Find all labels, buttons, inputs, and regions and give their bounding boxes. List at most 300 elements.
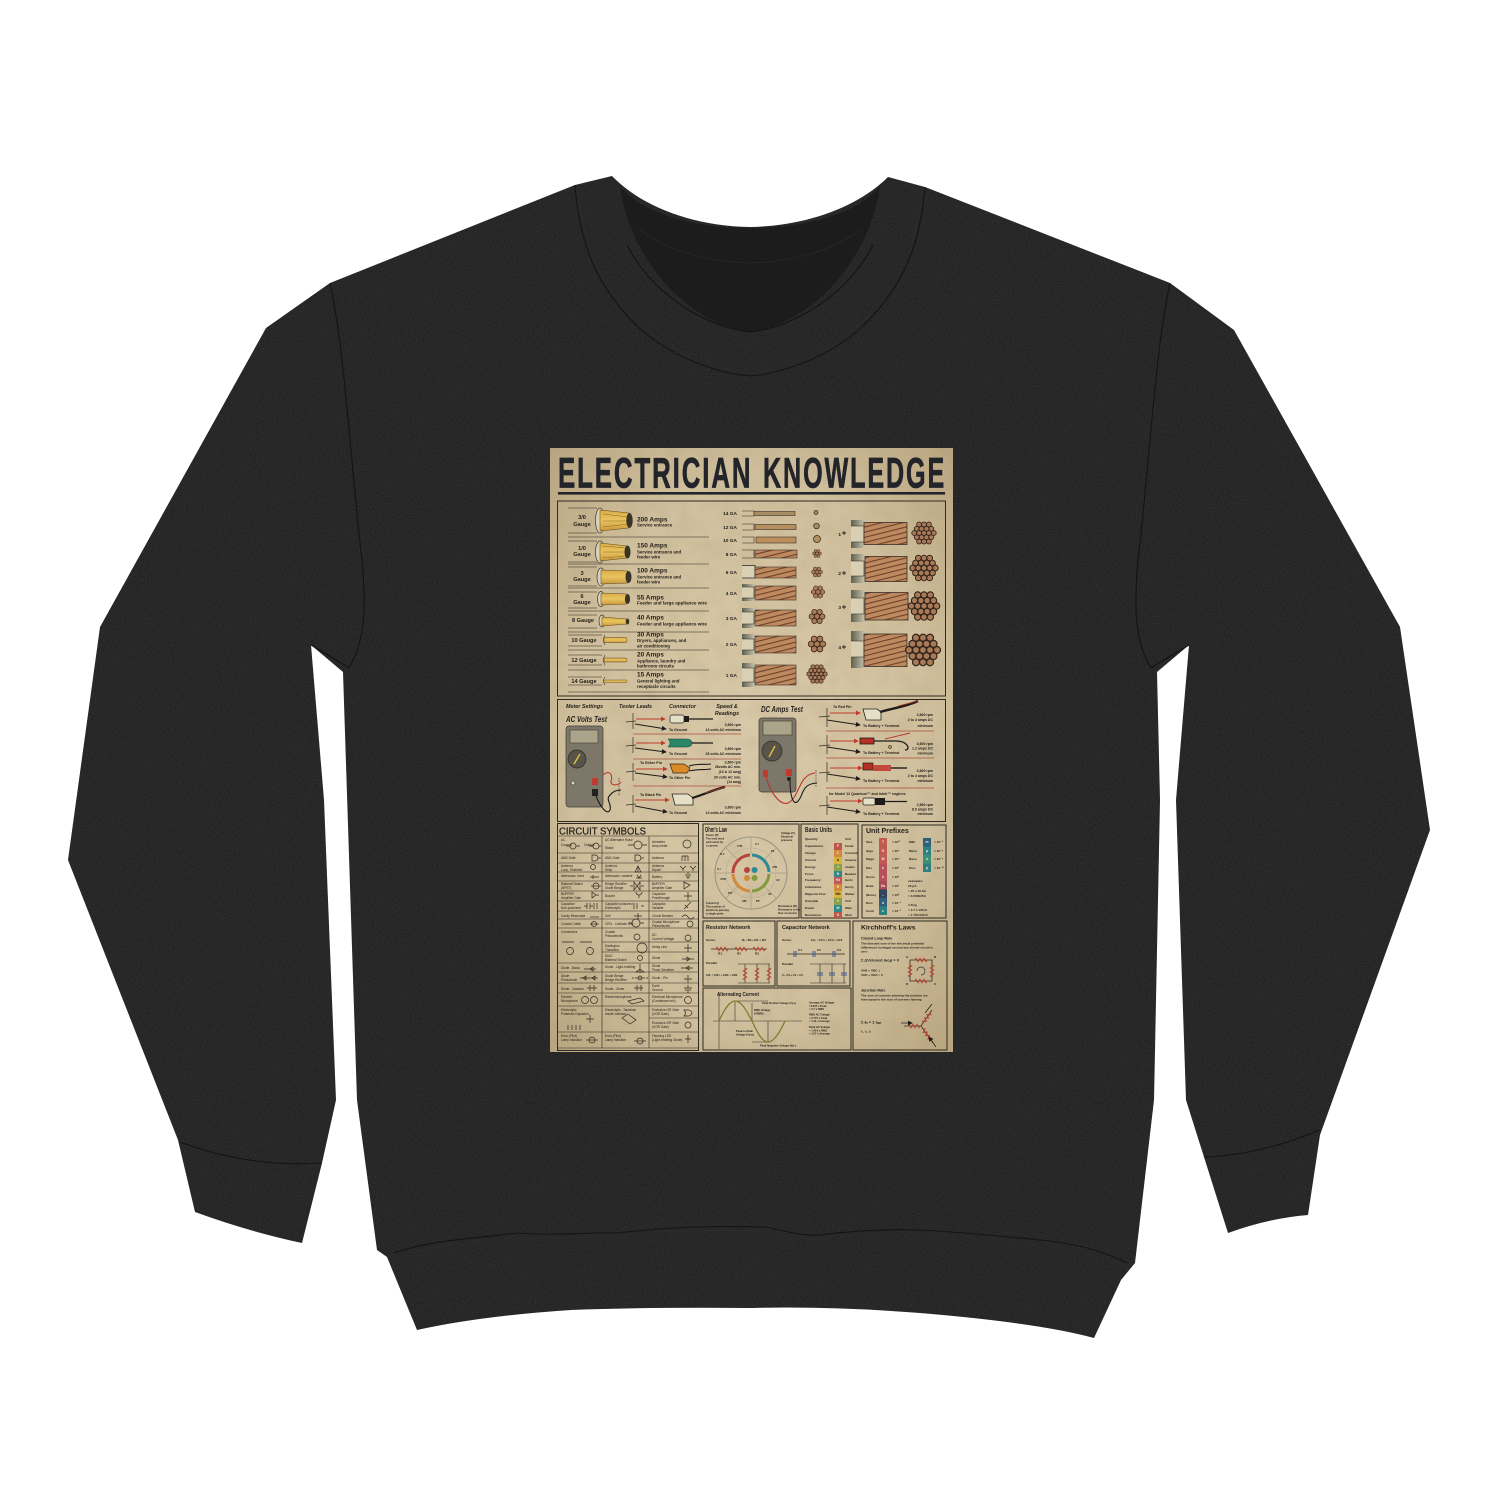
row: 3 gauge: 100 Amps (637, 568, 668, 574)
row: 3 gauge: feeder wire (637, 580, 661, 584)
AC row 1: 14 volts AC minimum (706, 728, 741, 732)
prefixes table: Micro (909, 849, 917, 853)
prefixes table: Giga (866, 849, 873, 853)
symbol labels, column 1: Cavity Resonator (561, 914, 586, 918)
units table: Quantity (805, 837, 818, 841)
DC row 3: 2 to 4 amps DC (908, 774, 933, 778)
panel: basic units (801, 824, 859, 918)
column headers: Speed & (716, 704, 738, 710)
units table: Ohm (845, 913, 852, 917)
wheel (715, 837, 787, 909)
DC row 2 (819, 733, 934, 758)
large cables 1/0 to 4/0 (838, 520, 940, 668)
copper wire sizes 14 GA to 1 GA: 12 GA (723, 525, 738, 531)
Ohm's law corner notes: a current (706, 844, 718, 848)
prefixes table: × 10⁰ (892, 893, 900, 897)
prefixes table: Centi (866, 909, 874, 913)
series diagram: C2 (817, 948, 821, 952)
symbol labels, column 2: Buzzer (605, 894, 616, 898)
symbol labels, column 2: Lamp Indicator (605, 1038, 627, 1042)
right cuff seam (1204, 1130, 1320, 1157)
prefixes table: × 10⁻³ (934, 840, 943, 844)
row: 10 gauge: 30 Amps (637, 632, 664, 638)
symbol labels, column 1: (SPST) (561, 886, 571, 890)
copper wire sizes 14 GA to 1 GA: 4 GA (726, 591, 738, 597)
symbol labels, column 1 (561, 838, 595, 1042)
wheel: V/R (742, 899, 747, 903)
series diagram (706, 938, 767, 956)
row: 1/0 gauge: feeder wire (637, 554, 661, 560)
voltage formulas: =0.637 x Peak (809, 1004, 827, 1008)
symbol labels, column 2: Whip (605, 868, 612, 872)
symbol labels, column 2: Diode Bridge (605, 974, 624, 978)
wheel: P/I² (756, 899, 760, 903)
row: 3 gauge: Service entrance and (637, 574, 681, 580)
AC row 2: 28 volts AC minimum (706, 752, 741, 756)
row: 12 gauge: bathroom circuits (637, 664, 675, 668)
units table: Wb (835, 892, 841, 896)
copper wire sizes 14 GA to 1 GA: 3 GA (726, 616, 738, 622)
units table: Charge (805, 851, 816, 855)
prefixes table: – (882, 893, 884, 897)
symbol labels, column 1: Amplifier Gate (561, 896, 581, 900)
row: 1/0 gauge: Gauge (573, 552, 591, 558)
collar (575, 185, 925, 376)
series diagram: R3 (755, 952, 759, 956)
panel: circuit symbols (558, 824, 698, 1050)
symbols grid (558, 836, 698, 1048)
prefixes table: c (882, 909, 884, 913)
DC row 1 (819, 701, 934, 731)
prefixes table: × 10⁻² (892, 909, 901, 913)
units table: C (837, 851, 840, 855)
row: 14 gauge: 15 Amps (637, 672, 664, 678)
prefixes table: G (882, 849, 885, 853)
wheel: R·I² (720, 852, 725, 856)
prefixes table: × 10⁻⁶ (934, 849, 944, 853)
Ohm's law corner notes (706, 831, 801, 916)
prefixes table: × 10⁻¹² (934, 866, 944, 870)
sweatshirt body silhouette (68, 176, 1430, 1338)
closed loop rule: zero (861, 950, 867, 954)
units table: Power (805, 906, 815, 910)
row: 14 gauge: 14 Gauge (571, 679, 597, 685)
symbol labels, column 3: Diode (652, 956, 661, 960)
AC volts test heading: AC Volts Test (565, 715, 607, 724)
symbol labels, column 1: BUFFER (561, 892, 574, 896)
row: 3/0 gauge (573, 508, 673, 533)
AC row 4: 3,600 rpm (725, 806, 741, 810)
AC row 4: To Black Pin (640, 793, 661, 797)
symbol labels, column 2: Electrolytic (605, 906, 621, 910)
symbol labels, column 3: Ammeter (652, 840, 666, 844)
heading: Basic Units (805, 827, 832, 834)
symbol labels, column 3: Feedthrough (652, 896, 670, 900)
parallel diagram: Cₜ =C1+ C2 + C3 (782, 973, 803, 977)
closed loop rule: VAB + VBC + (861, 968, 880, 972)
symbol labels, column 2: AND Gate (605, 856, 620, 860)
junction rule: then equal to the sum of currents leaving (861, 998, 922, 1002)
prefixes table: × 10¹ (892, 884, 899, 888)
closed loop rule: differences (voltage) around any closed circuit is (861, 946, 933, 950)
Ohm's law corner notes: Power (P) (706, 833, 718, 837)
symbol labels, column 2: Diode - Zener (605, 987, 625, 991)
symbol labels, column 1: Diode (561, 974, 570, 978)
wheel: P/I (771, 849, 775, 853)
series diagram (782, 938, 845, 957)
wheel: I·R (776, 878, 780, 882)
AC row 1: 3,600 rpm (725, 723, 741, 727)
prefixes table: Deci (866, 901, 873, 905)
title (558, 449, 946, 497)
sine chart: Voltage (Vp-p) (736, 1032, 754, 1036)
symbol labels, column 3 (652, 840, 683, 1042)
prefixes table: d (882, 901, 884, 905)
row: 1/0 gauge: Service entrance and (637, 550, 681, 554)
series diagram: Series (706, 938, 716, 942)
closed loop rule: VCD + VDA = 0 (861, 973, 883, 977)
units table: A (837, 858, 840, 862)
AC row 3: To Other Pin (669, 776, 690, 780)
parallel diagram (706, 961, 771, 983)
row: 3 gauge (573, 568, 681, 586)
hem seam (394, 1227, 1127, 1263)
DC row 4: 8.5 amps DC (912, 808, 933, 812)
symbol labels, column 2: Euro (Pilot) (605, 1034, 621, 1038)
prefixes table: m (925, 840, 929, 844)
DC row 2: minimum (917, 752, 933, 756)
Ohm's law corner notes: Resistance to the (778, 908, 801, 912)
symbol labels, column 1: Euro (Pilot) (561, 1034, 577, 1038)
column headers: Tester Leads (619, 704, 652, 710)
prefixes table: × 10⁻⁹ (934, 857, 944, 861)
closed loop rule: A (906, 955, 909, 959)
row: 10 gauge (571, 632, 687, 648)
DC row 3: 3,600 rpm (917, 769, 933, 773)
prefixes table: n (926, 857, 928, 861)
prefixes table: × 10³ (892, 866, 899, 870)
row: 14 gauge: receptacle circuits (637, 684, 676, 689)
prefixes table: Hecto (866, 875, 875, 879)
AC row 3: 30 volts AC min. (714, 776, 741, 780)
symbol labels, column 1: Diode - Varactor (561, 987, 585, 991)
parallel diagram: 1/Rₜ = 1/R1 + 1/R2 + 1/R3 (706, 973, 738, 977)
heading: Resistor Network (706, 925, 750, 931)
prefix examples (908, 879, 928, 917)
symbol labels, column 3: Antenna (652, 864, 664, 868)
units table (805, 837, 859, 918)
symbol labels, column 3: BUFFER (652, 882, 665, 886)
closed loop rule: B (934, 955, 937, 959)
symbol labels, column 2: Cell (605, 914, 611, 918)
symbol labels, column 2: Capacitor polarized (605, 902, 633, 906)
symbol labels, column 3: Capacitor (652, 902, 667, 906)
symbol labels, column 1: Coaxial Cable (561, 922, 581, 926)
copper wire sizes 14 GA to 1 GA: 1 GA (726, 673, 738, 679)
left cuff seam (180, 1142, 322, 1164)
symbol labels, column 1: Lamp Indicator (561, 1038, 583, 1042)
symbol labels, column 1: Electret (561, 995, 572, 999)
prefixes table: Deka (866, 884, 874, 888)
row: 3/0 gauge: 200 Amps (637, 516, 668, 524)
symbol labels, column 1: Capacitor (561, 902, 576, 906)
panel: resistor network (703, 921, 775, 986)
row: 6 gauge: 6 (580, 594, 584, 600)
wire cross sections (807, 510, 827, 683)
symbol labels, column 3: Electrical Microphone (652, 995, 683, 999)
AC row 4: 14 volts AC minimum (706, 811, 741, 815)
panel: unit prefixes (862, 825, 946, 918)
symbol labels, column 2: Electrolytic - Tantalum (605, 1008, 636, 1012)
symbol labels, column 3: Circuit Breaker (652, 914, 674, 918)
row: 14 gauge (571, 672, 680, 689)
panel: meter tests (558, 700, 946, 822)
heading: Ohm's Law (705, 827, 727, 834)
series diagram: C1 (798, 948, 802, 952)
symbol labels, column 3: Earth (652, 984, 660, 988)
copper wire sizes 14 GA to 1 GA: 2 GA (726, 642, 738, 648)
DC row 1: To Red Pin (833, 705, 852, 709)
parallel diagram (782, 962, 847, 983)
AC row 3: (10 & 12 awg) (719, 770, 741, 774)
symbol labels, column 1: Voltage (584, 843, 595, 847)
row: 1/0 gauge: 150 Amps (637, 542, 668, 550)
DC row 2: To Battery + Terminal (863, 751, 899, 755)
row: 10 gauge: Dryers, appliances, and (637, 638, 687, 643)
panel: capacitor network (777, 921, 850, 986)
symbol labels, column 1: Connectors (561, 930, 578, 934)
prefixes table: Pico (909, 866, 916, 870)
prefixes table: k (882, 866, 884, 870)
symbol labels, column 3: Antenna (652, 856, 664, 860)
symbol labels, column 3: Diode (652, 964, 661, 968)
fabric texture (60, 170, 1440, 1345)
title: ELECTRICIAN (558, 449, 752, 497)
symbol labels, column 3: Dipole (652, 868, 661, 872)
row: 10 gauge: 10 Gauge (571, 638, 597, 644)
wheel: √P/R (720, 877, 726, 881)
AC row 4: To Ground (669, 811, 687, 815)
wheel: V²/R (737, 844, 742, 848)
symbol labels, column 1: Non-polarized (561, 906, 581, 910)
voltage formulas: = 1.414 x RMS (809, 1028, 827, 1032)
series diagram: R2 (737, 952, 741, 956)
symbol labels, column 3: Delay Line (652, 945, 667, 949)
row: 12 gauge: 12 Gauge (571, 658, 597, 664)
copper wire sizes 14 GA to 1 GA: 8 GA (726, 552, 738, 558)
panel: Kirchhoff's laws (853, 921, 947, 1050)
units table: Henry (845, 885, 854, 889)
prefixes table: × 10⁻¹ (892, 901, 901, 905)
symbol labels, column 3: Battery (652, 875, 663, 879)
symbol labels, column 3: Variable (652, 906, 664, 910)
row: 8 gauge: Feeder and large appliance wire (637, 622, 708, 626)
prefixes table (866, 838, 944, 915)
symbol labels, column 2: Crystal (605, 930, 615, 934)
poster paper (550, 448, 953, 1052)
AC row 2 (626, 737, 741, 759)
wheel: V·I (717, 867, 721, 871)
DC row 1: 3,600 rpm (917, 713, 933, 717)
DC row 4: minimum (917, 812, 933, 816)
units table: Hz (836, 878, 840, 882)
parallel diagram: Parallel (782, 962, 793, 966)
Ohm's law corner notes: performed by (706, 840, 724, 844)
Ohm's law corner notes: a single point (706, 912, 723, 916)
prefix examples: = 4.7 x 106 Ω (908, 908, 927, 912)
symbol labels, column 3: Photo Sensitive (652, 968, 674, 972)
symbol labels, column 1: Photodiode (561, 978, 577, 982)
copper wire sizes 14 GA to 1 GA (723, 511, 797, 687)
units table: Frequency (805, 878, 821, 882)
AC row 4 (626, 787, 741, 815)
units table: Ampere (845, 858, 857, 862)
prefixes table: p (926, 866, 928, 870)
symbol labels, column 2: Transistor (605, 948, 620, 952)
symbol labels, column 2 (605, 838, 636, 1042)
copper wire sizes 14 GA to 1 GA: 10 GA (723, 538, 738, 544)
symbol labels, column 3: Crystal Microphone (652, 920, 680, 924)
DC amps test heading: DC Amps Test (761, 705, 803, 714)
Ohm's law corner notes: Electrical (781, 834, 793, 838)
closed loop rule: Closed Loop Rule (861, 936, 892, 940)
voltage formulas: = 1.57 x Average (809, 1032, 830, 1036)
symbol labels, column 2: Darlington (605, 944, 620, 948)
DC row 2: 3,600 rpm (917, 742, 933, 746)
units table: F (837, 844, 839, 848)
wheel: V·I (755, 842, 759, 846)
series diagram: Rₜ =R1+ R2 + R3 (742, 938, 766, 942)
series diagram: Series (782, 938, 792, 942)
symbol labels, column 3: (XOR Gate) (652, 1012, 669, 1016)
symbol labels, column 3: Current Voltage (652, 937, 674, 941)
row: 12 gauge (571, 652, 686, 668)
DC row 4: for Model 12 Quantum™ and Intek™ engines (829, 792, 905, 796)
row: 3 gauge: Gauge (573, 577, 591, 583)
units table: W (836, 906, 840, 910)
row: 3 gauge: 3 (580, 571, 584, 577)
large cables 1/0 to 4/0: 4 (838, 645, 841, 651)
junction rule: Σ Iᵢₙ = Σ Iₒᵤₜ (861, 1020, 882, 1024)
Ohm's law corner notes: Current (I) (706, 901, 719, 905)
units table: Farad (845, 844, 854, 848)
series diagram: R1 (718, 952, 722, 956)
units table: J (837, 865, 839, 869)
column headers: Meter Settings (566, 704, 603, 710)
copper wire sizes 14 GA to 1 GA: 6 GA (726, 570, 738, 576)
prefixes table: × 10⁹ (892, 849, 900, 853)
Ohm's law corner notes: electrons passing (706, 908, 729, 912)
heading: Unit Prefixes (866, 828, 909, 835)
row: 1/0 gauge: 1/0 (578, 546, 586, 552)
row: 3/0 gauge: Gauge (573, 522, 591, 528)
series diagram: C3 (837, 948, 841, 952)
voltage formulas: = 0.7 x RMS (809, 1007, 824, 1011)
units table: Magnetic Flux (805, 892, 826, 896)
units table: Hertz (845, 878, 853, 882)
prefixes table: Nano (909, 857, 917, 861)
symbol labels, column 1: Antenna (561, 864, 573, 868)
DC row 1: minimum (917, 724, 933, 728)
symbol labels, column 2: DIAC (605, 954, 613, 958)
symbol labels, column 2: Bilateral Switch (605, 958, 627, 962)
prefixes table: Mega (866, 857, 874, 861)
AC row 3: (14 awg) (727, 780, 741, 784)
row: 10 gauge: air conditioning (637, 644, 670, 648)
DC row 4: 2,800 rpm (917, 803, 933, 807)
Ohm's law corner notes: The number of (706, 904, 725, 908)
junction rule: The sum of currents entering the junction are (861, 994, 928, 998)
voltage formulas (809, 1000, 835, 1036)
sweatshirt (60, 170, 1440, 1345)
voltage formulas: = 0.707 x Peak (809, 1016, 828, 1020)
symbol labels, column 2: Piezoelectric (605, 934, 623, 938)
units table: N (837, 872, 840, 876)
voltage formulas: RMS AC Voltage (809, 1012, 830, 1016)
symbol labels, column 2: AC Alternator Rotor (605, 838, 634, 842)
symbol labels, column 1: Diode - Basic (561, 966, 580, 970)
symbol labels, column 1: Loop, Shielded (561, 868, 582, 872)
AC row 1: To Ground (669, 728, 687, 732)
heading: Capacitor Network (782, 925, 830, 931)
symbol labels, column 2: Antenna (605, 864, 617, 868)
prefixes table: T (882, 840, 885, 844)
row: 6 gauge: 55 Amps (637, 594, 664, 602)
icon: AC multimeter (566, 726, 621, 812)
prefixes table: μ (926, 849, 928, 853)
column headers (566, 704, 739, 717)
prefix examples: = 0.000025A (908, 894, 927, 898)
symbol labels, column 3: Flashing LED (652, 1034, 672, 1038)
AC row 2: To Ground (669, 752, 687, 756)
AC row 3 (626, 760, 741, 786)
symbol labels, column 2: Stator (605, 846, 614, 850)
sine chart: (VRMS) (754, 1012, 764, 1016)
units table: Current (805, 858, 816, 862)
series diagram: 1/Cₜ = 1/C1 + 1/C2 + 1/C3 (811, 938, 843, 942)
symbol labels, column 3: (Condenser mic) (652, 999, 676, 1003)
row: 6 gauge (573, 592, 708, 606)
units table: Newton (845, 872, 856, 876)
DC row 2: 1.2 amps DC (912, 746, 933, 750)
units table: Force (805, 872, 814, 876)
units table: Ω (837, 913, 840, 917)
symbol labels, column 3: (Light-emitting Diode) (652, 1038, 682, 1042)
symbol labels, column 2: anode cathode (605, 1012, 626, 1016)
row: 14 gauge: General lighting and (637, 678, 680, 684)
symbol labels, column 2: Bridge Rectifier (605, 882, 628, 886)
symbol labels, column 1: Bilateral Switch (561, 882, 583, 886)
Ohm's law corner notes: The total work (706, 836, 725, 840)
prefixes table: M (882, 857, 885, 861)
row: 6 gauge: Gauge (573, 600, 591, 606)
symbol labels, column 1: Current (561, 843, 572, 847)
closed loop rule: D (906, 982, 909, 986)
panel: Ohm's law (703, 824, 801, 918)
symbol labels, column 2: Diode - Light-emitting (605, 965, 636, 969)
sine chart: Peak Negative Voltage (Vp-) (760, 1044, 796, 1048)
row: 3/0 gauge: 3/0 (578, 515, 586, 521)
prefixes table: Milli (909, 840, 915, 844)
heading: CIRCUIT SYMBOLS (559, 826, 646, 838)
sine chart: RMS Voltage (754, 1008, 771, 1012)
row: 8 gauge: 40 Amps (637, 614, 664, 622)
Ohm's law corner notes: Voltage (V) (781, 831, 795, 835)
units table: Unit (845, 837, 851, 841)
prefixes table: Tera (866, 840, 873, 844)
symbol labels, column 3: Amp meter (652, 844, 669, 848)
symbol labels, column 1: Microphone (561, 999, 578, 1003)
